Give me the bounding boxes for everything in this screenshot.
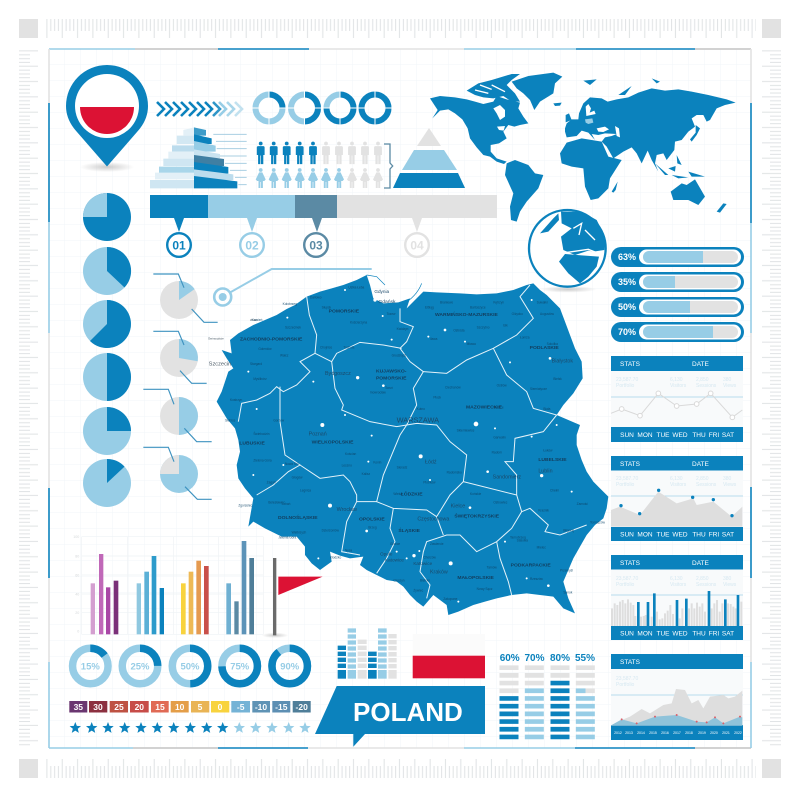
panel: stats line chart: SAT [722,432,734,439]
panel: stats layered area chart: 2019 [698,731,706,735]
city dots [228,289,573,603]
small town labels: Bielsko [420,579,430,583]
small town labels: Końskie [470,492,481,496]
panel: stats area chart: Views [723,482,737,488]
panel: stats area chart: WED [672,532,688,538]
small town labels: Myślibórz [253,377,267,381]
small town labels: Szczytno [477,325,490,329]
grouped bar chart: 100 [73,535,79,539]
panel: stats bar chart: Sessions [696,582,717,588]
panel: stats line chart: SUN [620,432,634,439]
major city labels: Sandomierz [493,474,521,480]
major city labels: Kraków [430,569,448,575]
panel: stats line chart: Portfolio [616,383,635,389]
panel: stats bar chart: 380 [723,576,732,582]
region names: LUBUSKIE [239,440,265,446]
page frame with grid [49,49,751,748]
progress bars: 63% [618,252,636,262]
small town labels: Kwidzyn [397,327,409,331]
small town labels: Wałbrzych [292,530,307,534]
panel: stats bar chart: 23,587.70 [616,576,638,582]
temperature scale: 0 [218,702,223,712]
small town labels: Konin [373,460,382,464]
major city labels: Kielce [451,503,465,509]
panel: stats layered area chart: Portfolio [616,682,635,688]
small town labels: Płock [433,395,441,399]
small town labels: Ostrowiec [493,500,508,504]
major city labels: Gdynia [374,289,389,294]
small town labels: Zielona Góra [253,459,272,463]
region names: MAŁOPOLSKIE [457,575,495,581]
panel: stats layered area chart: 2017 [673,731,681,735]
percentage level columns: 70% [524,653,545,664]
temperature scale: 10 [175,702,185,712]
major city labels: Łódź [425,460,437,466]
percentage level columns [500,653,595,739]
small town labels: Legnica [300,489,311,493]
small town labels: Zawiercie [430,542,444,546]
small town labels: Kłodzko [330,555,341,559]
small town labels: Świebodzin [253,431,270,436]
temperature scale: -20 [296,702,308,712]
small town labels: Przemyśl [560,569,573,573]
panel: stats bar chart: 6,130 [670,576,683,582]
small town labels: Kościerzyna [350,320,367,324]
major city labels: Katowice [385,558,404,563]
temperature scale: 25 [114,702,124,712]
panel: stats area chart: MON [637,532,653,538]
Poland highlight [585,118,593,124]
region names: ŚWIĘTOKRZYSKIE [454,513,500,520]
panel: stats layered area chart: 2015 [649,731,657,735]
Australia [671,179,705,205]
small town labels: Ustka Łeba [348,285,365,289]
grouped bar chart: 0 [77,630,79,634]
small town labels: Gliwice [390,542,400,546]
triangle pyramid [393,128,465,188]
pictogram: men and women counts [256,142,393,188]
left column pie charts [83,193,131,507]
small town labels: Ostrów [497,384,507,388]
major city labels: Lublin [538,469,553,475]
major city labels: Gdańsk [378,299,396,305]
percent donut row: 90% [280,662,300,672]
percentage level columns: 60% [500,653,520,664]
panel: stats area chart: 6,130 [670,476,683,482]
major city labels: Bydgoszcz [325,371,351,377]
panel: stats area chart: SAT [722,532,734,538]
panel: stats bar chart [611,555,743,640]
quarter-segment donut icons [251,90,393,126]
small town labels: Sanok [563,590,573,594]
panel: stats area chart: 23,587.70 [616,476,638,482]
temperature scale: 15 [155,702,165,712]
small town labels: Radomsko [447,470,462,474]
percentage level columns: 55% [575,653,595,664]
panel: stats bar chart: Visitors [670,582,687,588]
major city labels: Wrocław [337,507,357,513]
icon: red pennant flag [262,558,323,638]
region names: WIELKOPOLSKIE [312,439,354,445]
small town labels: Inowrocław [370,390,387,394]
small town labels: Stargard [250,362,262,366]
small town labels [225,285,606,601]
small town labels: Siemiatycze [530,387,547,391]
panel: stats area chart: 2,850 [696,476,709,482]
small town labels: Żagań [267,479,276,484]
major city labels: Katowice [413,561,433,566]
panel: stats bar chart: FRI [709,630,719,638]
North America [430,96,528,164]
small town labels: Tczew [387,312,396,316]
small town labels: Jelenia Góra [278,535,296,539]
region names: PODKARPACKIE [511,562,551,568]
flag of Poland [413,634,485,678]
region names: ŚLĄSKIE [398,527,421,534]
panel: stats layered area chart: 2016 [661,731,669,735]
percent donut row: 25% [130,662,150,672]
panel: stats area chart: Visitors [670,482,687,488]
small town labels: Brzeg [368,525,377,529]
panel: stats bar chart: Views [723,582,737,588]
major city labels: Białystok [552,358,573,364]
panel: stats area chart: DATE [692,461,710,468]
small town labels: Łuków [543,449,553,453]
progress bars: 70% [618,327,636,337]
voivodeship borders [238,285,587,598]
region names: POMORSKIE [376,376,407,382]
small town labels: Nysa [345,549,352,553]
panel: stats line chart: FRI [709,432,719,439]
panel: stats area chart: Sessions [696,482,717,488]
panel: stats area chart: THU [692,532,706,538]
small town labels: Biała [543,407,551,411]
Canadian Arctic [467,74,520,102]
panel: stats line chart: Views [723,383,737,389]
temperature scale [69,701,311,712]
target marker with connector line [214,269,372,306]
progress bars: 35% [618,277,636,287]
region names: DOLNOŚLĄSKIE [278,514,318,521]
small town labels: Nowy Sącz [477,587,493,591]
small town labels: Słupsk [322,305,332,309]
region names: LUBELSKIE [538,457,567,463]
icon: map pin with Polish flag [66,65,148,172]
Africa [560,138,622,200]
small town labels: Bolesławiec [268,500,285,504]
panel: stats layered area chart: 2013 [625,731,633,735]
outside labels: Wolin [250,318,258,322]
small town labels: Gorzów [273,419,285,423]
Eurasia [565,88,736,172]
major city labels [309,289,573,575]
panel: stats line chart: Visitors [670,383,687,389]
region names: MAZOWIECKIE [466,404,503,410]
small town labels: Nowa Sól [285,462,299,466]
region names: POMORSKIE [329,308,360,314]
region names [239,308,567,581]
small town labels: Grudziądz [392,354,406,358]
percent donut row: 50% [180,662,200,672]
small town labels: Chojnice [320,345,333,349]
panel: stats line chart: MON [637,432,653,439]
temperature scale: 35 [74,702,83,712]
progress bars [611,247,744,342]
small town labels: Biłgoraj [563,529,574,533]
small town labels: Zakopane [443,597,458,601]
small town labels: Sieradz [397,465,408,469]
small town labels: Suwałki [537,300,548,304]
panel: stats line chart: THU [692,432,706,439]
region names: WARMIŃSKO-MAZURSKIE [435,310,499,318]
region names: PODLASKIE [530,345,559,351]
small town labels: Piotrków [423,480,436,484]
timeline bar 01 to 04: 04 [410,238,424,252]
timeline bar 01 to 04: 03 [309,238,323,252]
small town labels: Iława [430,337,438,341]
POLAND banner [315,686,485,747]
temperature scale: 5 [198,702,203,712]
panel: stats line chart: Sessions [696,383,717,389]
temperature scale: -5 [237,702,245,712]
small town labels: Ciechanów [445,385,461,389]
panel: stats bar chart: THU [692,630,706,638]
panel: stats bar chart: DATE [692,560,710,567]
percentage level columns: 80% [550,653,570,664]
star rating [70,722,311,733]
small town labels: Wieluń [393,492,403,496]
major city labels: Poznań [309,432,327,438]
small town labels: Mielec [537,545,546,549]
panel: stats layered area chart: 2021 [722,731,730,735]
chevron arrows [157,102,242,116]
seas and lakes [475,85,620,137]
panel: stats bar chart: Portfolio [616,582,635,588]
panel: stats bar chart: STATS [620,560,641,567]
temperature scale: 30 [93,702,103,712]
equalizer chart [338,628,397,679]
small town labels: Darłowo [310,295,322,299]
temperature scale: -10 [255,702,267,712]
small town labels: Radom [492,450,502,454]
small town labels: Łomża [520,335,530,339]
small town labels: Kutno [417,407,425,411]
grouped bar chart: 20 [75,611,79,615]
panel: stats area chart: Portfolio [616,482,635,488]
small town labels: Kalisz [362,472,371,476]
stepped pyramid chart [150,127,247,188]
small town labels: Zamość [577,502,588,506]
percent donut row: 75% [230,662,250,672]
temperature scale: 20 [135,702,144,712]
small town labels: Giżycko [512,312,523,316]
panel: stats area chart: 380 [723,476,732,482]
grouped bar chart: 40 [75,592,79,596]
major city labels: WARSZAWA [397,415,439,424]
islands [553,78,727,213]
small town labels: Lubań [282,502,291,506]
panel: stats area chart: TUE [656,532,670,538]
panel: stats area chart: FRI [709,532,719,538]
small town labels: Kraśnik [538,509,549,513]
small town labels: Kętrzyn [493,300,504,304]
globe [529,210,606,293]
timeline bar 01 to 04: 02 [245,238,259,252]
small town labels: Chorzów [423,555,437,559]
small town labels: Wałcz [280,354,289,358]
small town labels: Cieszyn [393,579,405,583]
panel: stats bar chart: SAT [722,630,734,638]
panel: stats layered area chart: 23,587.70 [616,676,638,682]
panel: stats layered area chart [611,654,743,740]
small town labels: Głogów [292,475,303,479]
small town labels: Ostróda [453,329,465,333]
small town labels: Tomaszów [590,520,606,524]
temperature scale: -15 [275,702,288,712]
small town labels: Bartoszyce [470,305,486,309]
small town labels: Słubice [225,419,236,423]
panel: stats line chart [611,356,743,442]
small town labels: Toruń [385,386,393,390]
panel: stats bar chart: WED [672,630,688,638]
timeline bar 01 to 04: 01 [172,238,186,252]
small town labels: Ełk [503,324,508,328]
panel: stats line chart: STATS [620,361,641,368]
outside labels: Szczecin [209,361,231,367]
panel: stats layered area chart: 2022 [734,731,742,735]
outside labels: Świnoujście [208,335,224,340]
small town labels: Kamień [252,318,263,322]
panel: stats line chart: 6,130 [670,377,683,383]
small gray pies with callout lines [143,274,218,499]
small town labels: Skierniewice [457,429,475,433]
map of Poland [208,275,608,615]
panel: stats area chart: STATS [620,461,641,468]
region names: ZACHODNIO-POMORSKIE [240,337,303,343]
small town labels: Leszno [342,464,352,468]
grouped bar chart [73,535,263,634]
panel: stats bar chart: 2,850 [696,576,709,582]
country shape [217,275,608,615]
grouped bar chart: 60 [75,573,79,577]
panel: stats line chart: 2,850 [696,377,709,383]
region names: KUJAWSKO- [376,368,407,374]
small town labels: Siedlce [493,405,504,409]
world map [430,73,736,222]
timeline bar 01 to 04 [150,195,497,257]
small town labels: Elbląg [425,305,434,309]
small town labels: Chełm [550,489,559,493]
panel: stats layered area chart: 2014 [637,731,645,735]
region names: OPOLSKIE [359,517,385,523]
panel: stats line chart: WED [672,432,688,439]
small town labels: Mława [467,342,476,346]
panel: stats layered area chart: 2012 [614,731,622,735]
panel: stats line chart: TUE [656,432,670,439]
panel: stats line chart: DATE [692,361,710,368]
panel: stats bar chart: SUN [620,630,634,638]
panel: stats area chart [611,456,743,541]
region names: ŁÓDZKIE [401,490,423,498]
panel: stats bar chart: TUE [656,630,670,638]
small town labels: Rzeszów [530,577,544,581]
small town labels: Tuchola [343,345,355,349]
small town labels: Żywiec [413,588,424,593]
panel: stats layered area chart: STATS [620,659,641,666]
small town labels: Augustów [540,312,555,316]
small town labels: Tarnobrzeg [510,535,526,539]
panel: stats line chart: 380 [723,377,732,383]
POLAND banner: POLAND [353,697,463,727]
small town labels: Kostrzyn [230,398,243,402]
panel: stats area chart: SUN [620,532,634,538]
panel: stats line chart: 23,587.70 [616,377,638,383]
South America [505,160,543,222]
panel: stats layered area chart: 2018 [685,731,693,735]
small town labels: Sokółka [547,342,558,346]
small town labels: Szczecinek [285,325,301,329]
small town labels: Zgorzelec [238,504,253,508]
panel: stats layered area chart: 2020 [710,731,718,735]
percent donut row [73,648,307,684]
percent donut row: 15% [81,662,100,672]
small town labels: Bielsk [553,377,562,381]
progress bars: 50% [618,302,636,312]
small town labels: Garwolin [493,435,506,439]
Greenland [512,73,562,110]
major city labels: Opole [380,552,393,557]
small town labels: Goleniów [258,347,272,351]
outside labels [208,318,258,367]
panel: stats bar chart: MON [637,630,653,638]
major city labels: Częstochowa [417,517,449,523]
small town labels: Braniewo [440,300,453,304]
small town labels: Kołobrzeg [283,302,297,306]
small town labels: Kościan [345,452,356,456]
small town labels: Stalowa [517,539,528,543]
small town labels: Dzierżoniów [322,529,340,533]
small town labels: Tarnów [487,565,498,569]
grouped bar chart: 80 [75,554,79,558]
